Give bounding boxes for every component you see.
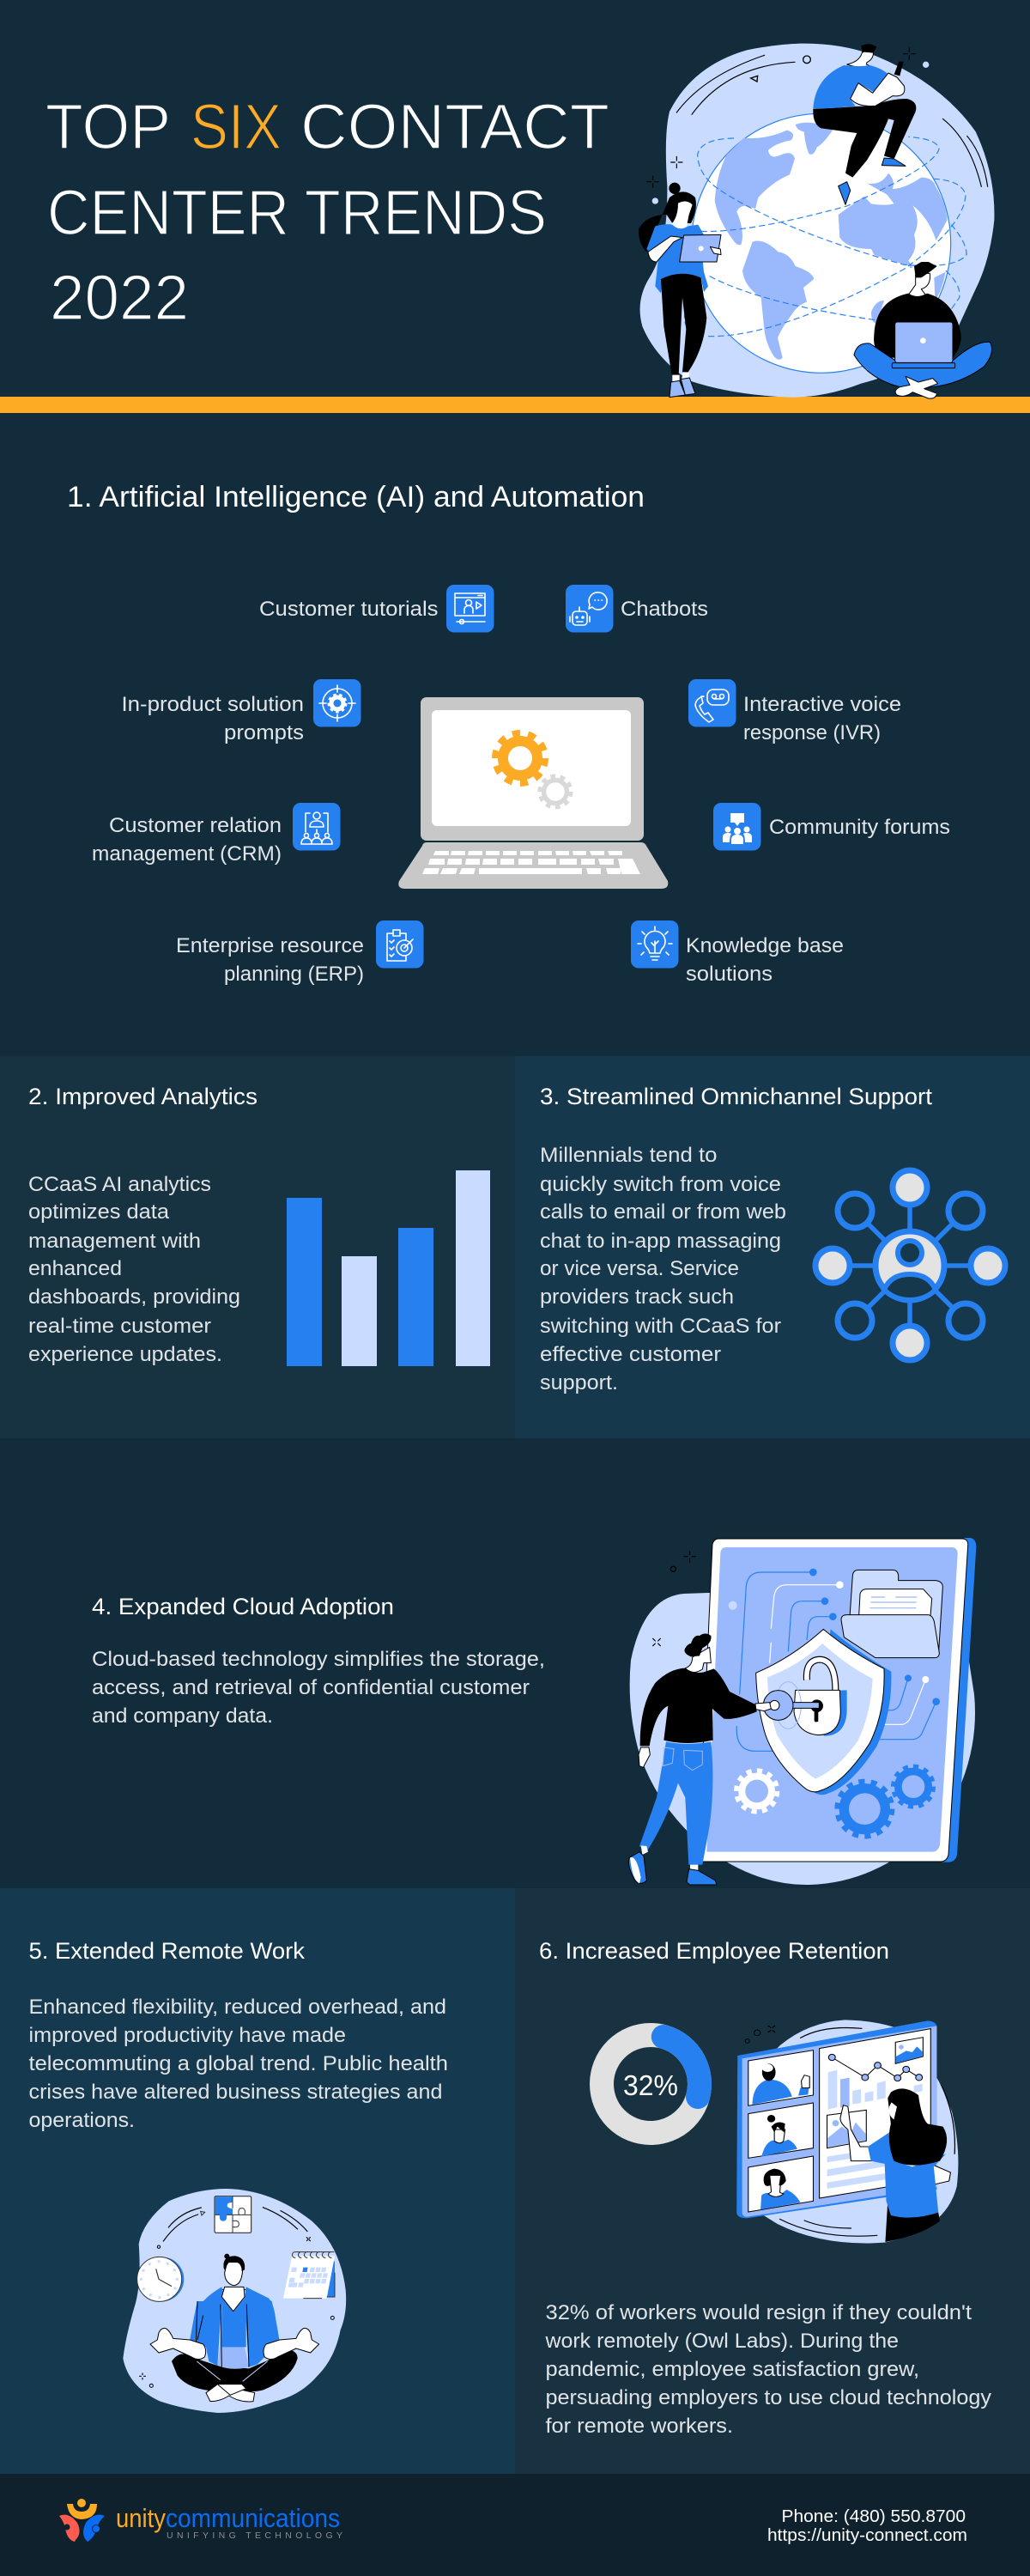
item: customer relation management bbox=[92, 803, 340, 866]
body text 3: quickly switch from voice bbox=[540, 1173, 781, 1196]
heading 3: 3. Streamlined Omnichannel Support bbox=[540, 1084, 933, 1109]
video tiles people bbox=[752, 2063, 809, 2209]
panel: streamlined omnichannel support bbox=[515, 1056, 1030, 1438]
hero illustration: globe with three people bbox=[639, 44, 994, 398]
illustration: cloud security bbox=[628, 1538, 976, 1885]
gears bbox=[736, 1766, 933, 1836]
body text 2: real-time customer bbox=[28, 1315, 211, 1338]
body text 3: Millennials tend to bbox=[540, 1144, 718, 1167]
gold header bar bbox=[0, 397, 1030, 413]
body text 2: CCaaS AI analytics bbox=[28, 1173, 211, 1196]
contact info: Phone: (480) 550.8700 bbox=[781, 2507, 966, 2526]
item: community forums bbox=[713, 803, 950, 850]
donut chart 32% bbox=[602, 2035, 700, 2133]
title: 2022 bbox=[50, 262, 189, 333]
body text 4: and company data. bbox=[92, 1704, 273, 1728]
illustration: meditating remote worker bbox=[123, 2189, 346, 2413]
icon: grey gear bbox=[540, 776, 571, 807]
body text 3 bbox=[540, 1144, 786, 1394]
logo: UNIFYING TECHNOLOGY bbox=[167, 2530, 342, 2541]
footer bbox=[0, 2474, 1030, 2576]
item: enterprise resource planning: planning (ERP) bbox=[224, 963, 364, 986]
heading 2: 2. Improved Analytics bbox=[28, 1084, 258, 1109]
item: customer relation management: Customer relation bbox=[109, 814, 282, 837]
folder bbox=[841, 1570, 942, 1658]
body text 6: pandemic, employee satisfaction grew, bbox=[546, 2358, 919, 2381]
body text 4: access, and retrieval of confidential customer bbox=[92, 1676, 530, 1699]
person on top of globe bbox=[813, 44, 916, 204]
body text 3: chat to in-app massaging bbox=[540, 1230, 781, 1253]
panel: expanded cloud adoption bbox=[92, 1538, 976, 1885]
puzzle bbox=[215, 2196, 251, 2233]
contact info: https://unity-connect.com bbox=[767, 2526, 967, 2545]
item: in-product solution prompts: prompts bbox=[224, 721, 304, 744]
title: CENTER TRENDS bbox=[47, 177, 547, 248]
title: SIX bbox=[191, 91, 282, 162]
illustration: video conference dashboard bbox=[736, 2020, 958, 2243]
body text 3: support. bbox=[540, 1371, 618, 1394]
item: interactive voice response: response (IVR) bbox=[743, 721, 881, 744]
item: customer tutorials: Customer tutorials bbox=[259, 598, 438, 621]
heading 5: 5. Extended Remote Work bbox=[29, 1938, 306, 1964]
body text 2: optimizes data bbox=[28, 1200, 170, 1224]
body text 6: persuading employers to use cloud technology bbox=[546, 2386, 991, 2409]
icon: orange gear bbox=[495, 733, 545, 783]
donut chart 32%: 32% bbox=[623, 2069, 678, 2101]
bar chart bbox=[287, 1170, 490, 1366]
body text 5: operations. bbox=[29, 2109, 135, 2132]
body text 2: enhanced bbox=[28, 1257, 122, 1280]
body text 4: Cloud-based technology simplifies the storage, bbox=[92, 1648, 545, 1671]
shield with lock bbox=[756, 1629, 891, 1795]
icon: omnichannel network bbox=[815, 1170, 1005, 1360]
body text 2: management with bbox=[28, 1230, 201, 1253]
woman presenter bbox=[840, 2088, 950, 2242]
body text 3: switching with CCaaS for bbox=[540, 1315, 781, 1338]
body text 3: effective customer bbox=[540, 1343, 721, 1366]
title: CONTACT bbox=[300, 91, 609, 162]
body text 2 bbox=[28, 1173, 240, 1366]
contact info bbox=[767, 2507, 967, 2545]
body text 3: or vice versa. Service bbox=[540, 1257, 739, 1280]
item: knowledge base solutions: solutions bbox=[686, 963, 772, 986]
body text 4 bbox=[92, 1648, 545, 1728]
item: knowledge base solutions bbox=[631, 920, 844, 986]
panel: increased employee retention bbox=[515, 1888, 1030, 2474]
logo: communications bbox=[166, 2503, 340, 2533]
body text 6: for remote workers. bbox=[546, 2415, 733, 2438]
person with laptop bbox=[854, 262, 992, 398]
item: customer relation management: management (CRM) bbox=[92, 842, 282, 866]
meditating person bbox=[150, 2254, 319, 2402]
heading 4: 4. Expanded Cloud Adoption bbox=[92, 1594, 394, 1619]
person with tablet bbox=[639, 183, 721, 398]
section 1 heading: 1. Artificial Intelligence (AI) and Automation bbox=[67, 481, 645, 513]
logo bbox=[59, 2499, 342, 2542]
body text 5: crises have altered business strategies and bbox=[29, 2081, 443, 2104]
item: enterprise resource planning bbox=[176, 920, 424, 986]
panel: extended remote work bbox=[0, 1888, 515, 2474]
panel: improved analytics bbox=[0, 1056, 515, 1438]
body text 3: providers track such bbox=[540, 1285, 734, 1309]
body text 2: experience updates. bbox=[28, 1343, 222, 1366]
body text 5: improved productivity have made bbox=[29, 2024, 346, 2047]
item: customer tutorials bbox=[259, 585, 494, 632]
logo: unity bbox=[116, 2503, 166, 2533]
item: interactive voice response: Interactive voice bbox=[743, 693, 901, 716]
mini charts bbox=[827, 2038, 923, 2189]
item: community forums: Community forums bbox=[769, 816, 950, 839]
body text 6: 32% of workers would resign if they couldn't bbox=[546, 2301, 972, 2324]
item: enterprise resource planning: Enterprise resource bbox=[176, 934, 364, 957]
item: chatbots: Chatbots bbox=[621, 598, 708, 621]
heading 6: 6. Increased Employee Retention bbox=[539, 1938, 889, 1964]
person with key bbox=[628, 1633, 771, 1885]
item: knowledge base solutions: Knowledge base bbox=[686, 934, 844, 957]
item: interactive voice response bbox=[688, 679, 901, 744]
title: TOP bbox=[45, 91, 171, 162]
clock bbox=[137, 2257, 184, 2301]
body text 6 bbox=[544, 2301, 991, 2438]
item: in-product solution prompts: In-product solution bbox=[122, 693, 304, 716]
laptop with gears bbox=[398, 697, 668, 889]
title bbox=[45, 91, 609, 333]
calendar bbox=[283, 2252, 335, 2299]
icon: unity logo mark bbox=[59, 2499, 105, 2542]
body text 6: work remotely (Owl Labs). During the bbox=[544, 2330, 899, 2353]
item: chatbots bbox=[566, 585, 708, 632]
item: in-product solution prompts bbox=[122, 679, 360, 744]
body text 2: dashboards, providing bbox=[28, 1285, 240, 1309]
body text 3: calls to email or from web bbox=[540, 1200, 786, 1224]
body text 5: telecommuting a global trend. Public health bbox=[29, 2052, 448, 2075]
body text 5: Enhanced flexibility, reduced overhead, and bbox=[29, 1996, 446, 2019]
body text 5 bbox=[29, 1996, 448, 2132]
